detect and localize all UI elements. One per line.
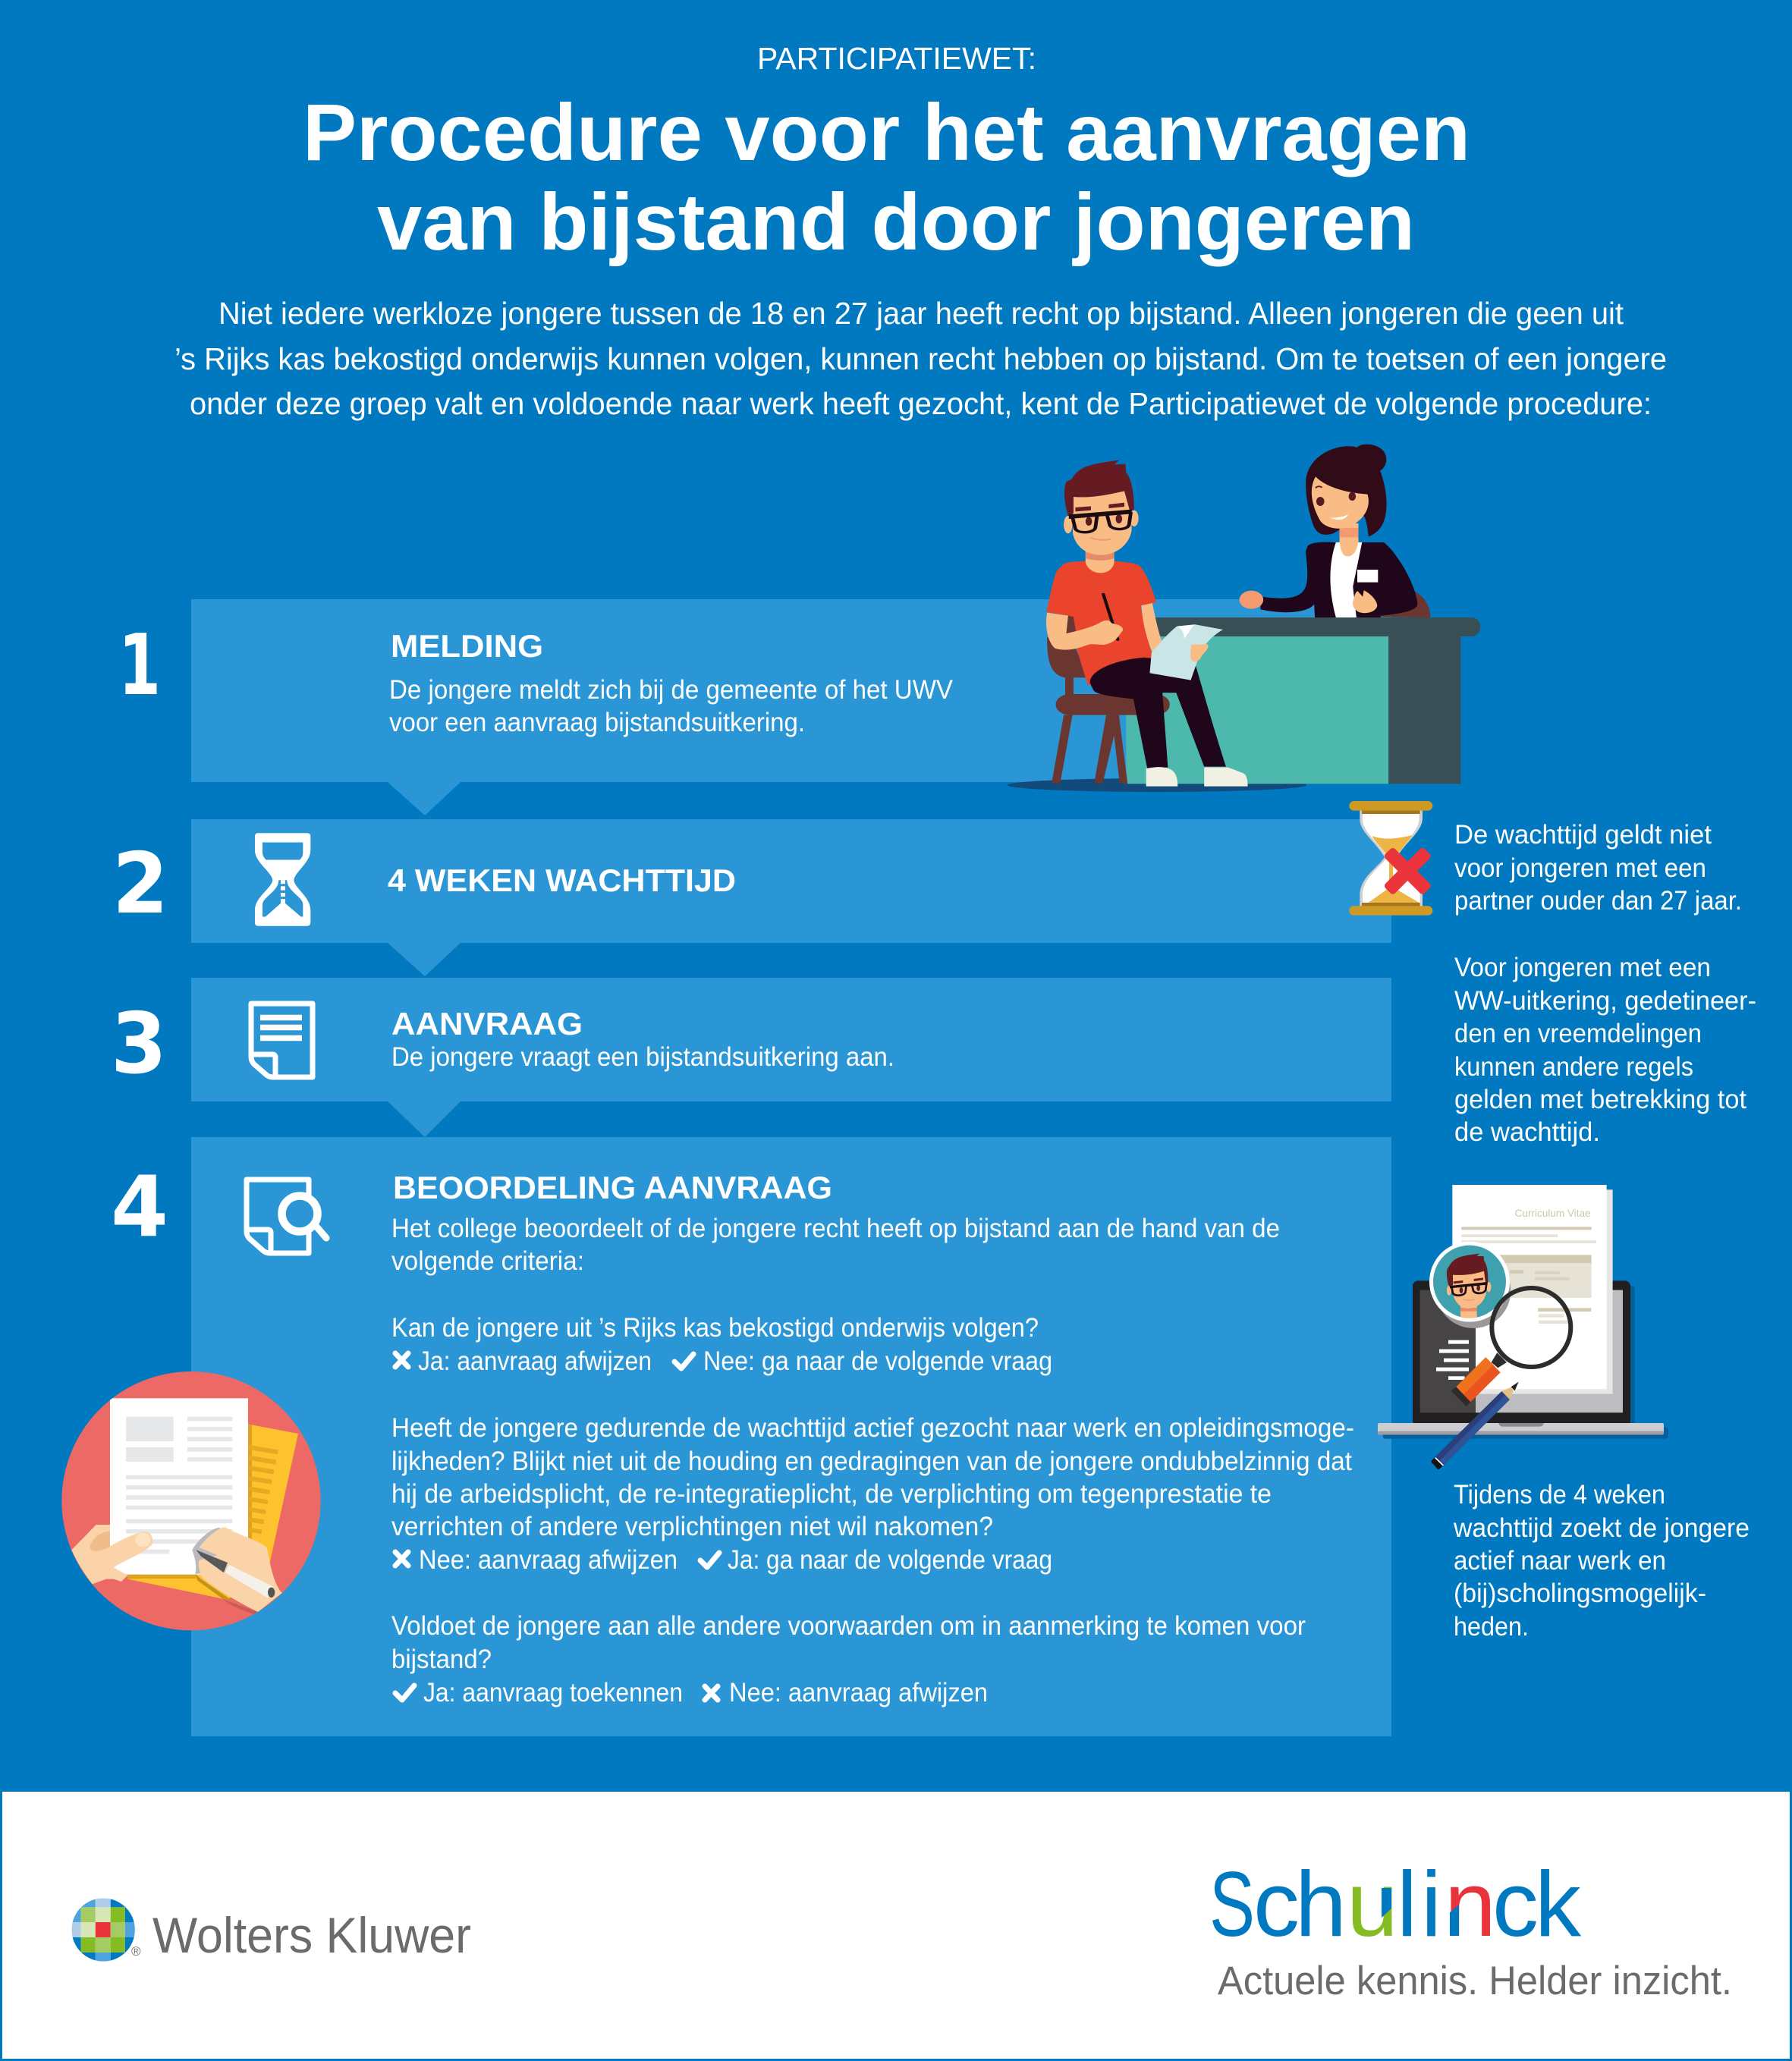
side note: zoeken naar werk bbox=[1453, 1479, 1750, 1642]
side note: wachttijd exceptions: Voor jongeren met een bbox=[1454, 952, 1711, 982]
illustration: man and receptionist at desk bbox=[1008, 445, 1480, 792]
body: melding: De jongere meldt zich bij de gemeente of het UWV bbox=[389, 674, 953, 705]
panel: melding bbox=[191, 599, 1391, 815]
desk bbox=[1126, 636, 1460, 784]
wordmark: Wolters Kluwer bbox=[152, 1907, 471, 1963]
icon: document bbox=[251, 1004, 313, 1077]
side note: wachttijd exceptions: kunnen andere regels bbox=[1454, 1051, 1693, 1082]
side note: wachttijd exceptions bbox=[1454, 819, 1756, 1147]
panel: wachttijd bbox=[191, 819, 1391, 976]
side note: zoeken naar werk: Tijdens de 4 weken bbox=[1454, 1479, 1665, 1510]
side note: wachttijd exceptions: partner ouder dan 27 jaar. bbox=[1454, 885, 1742, 916]
desk top bbox=[1153, 617, 1480, 636]
cv label: Curriculum Vitae bbox=[1515, 1207, 1591, 1219]
text: introduction criteria: Het college beoordeelt of de jongere recht heeft op bijstand aan de hand van de bbox=[391, 1213, 1280, 1243]
text: question 2: hij de arbeidsplicht, de re-integratieplicht, de verplichting om tegenprestatie te bbox=[391, 1478, 1272, 1509]
side note: wachttijd exceptions: voor jongeren met een bbox=[1454, 853, 1706, 883]
yellow sheet bbox=[127, 1424, 298, 1600]
intro text bbox=[174, 296, 1667, 421]
step numbers: 4 bbox=[111, 1158, 168, 1256]
wordmark: h bbox=[1295, 1852, 1347, 1956]
seated man bbox=[1046, 460, 1248, 787]
icon: hourglass bbox=[255, 833, 310, 926]
tagline: Actuele kennis. Helder inzicht. bbox=[1218, 1959, 1732, 2003]
side note: zoeken naar werk: actief naar werk en bbox=[1454, 1545, 1666, 1576]
text: question 1 bbox=[391, 1312, 1052, 1376]
body: melding bbox=[389, 674, 953, 737]
white sheet bbox=[110, 1398, 248, 1575]
heading: aanvraag: AANVRAAG bbox=[391, 1006, 583, 1041]
logo: schulinck bbox=[1209, 1852, 1732, 2003]
title: Procedure voor het aanvragen bbox=[303, 88, 1470, 178]
text: question 3 bbox=[391, 1610, 1306, 1708]
panel: aanvraag bbox=[191, 978, 1391, 1137]
wordmark: c bbox=[1492, 1852, 1539, 1956]
text: introduction criteria: volgende criteria: bbox=[391, 1246, 584, 1276]
laptop base bbox=[1378, 1423, 1664, 1434]
heading: melding: MELDING bbox=[391, 628, 543, 664]
wordmark: S bbox=[1209, 1852, 1255, 1956]
side note: wachttijd exceptions: WW-uitkering, gedetineer- bbox=[1454, 985, 1756, 1016]
wordmark: i bbox=[1421, 1852, 1441, 1956]
step numbers: 1 bbox=[118, 617, 161, 715]
floor shadow bbox=[1008, 778, 1306, 792]
icon: document with magnifier bbox=[247, 1180, 326, 1253]
body: melding: voor een aanvraag bijstandsuitkering. bbox=[389, 707, 805, 737]
pencil bbox=[1431, 1382, 1519, 1470]
text: introduction criteria bbox=[391, 1213, 1280, 1276]
text: question 1: Nee: ga naar de volgende vraag bbox=[703, 1346, 1052, 1376]
icon: hourglass with red cross bbox=[1349, 801, 1432, 916]
side note: zoeken naar werk: heden. bbox=[1454, 1611, 1529, 1642]
text: question 2: Nee: aanvraag afwijzen bbox=[419, 1544, 678, 1575]
logo mark bbox=[71, 1898, 135, 1962]
wordmark: c bbox=[1253, 1852, 1300, 1956]
magnifier bbox=[1451, 1288, 1570, 1406]
title bbox=[303, 88, 1470, 267]
body: aanvraag: De jongere vraagt een bijstandsuitkering aan. bbox=[391, 1041, 894, 1072]
heading: beoordeling aanvraag: BEOORDELING AANVRAAG bbox=[393, 1170, 832, 1205]
header bbox=[174, 41, 1667, 421]
text: question 2: Ja: ga naar de volgende vraag bbox=[728, 1544, 1052, 1575]
text: question 3: Ja: aanvraag toekennen bbox=[423, 1677, 683, 1708]
registered mark: ® bbox=[131, 1944, 141, 1959]
side note: zoeken naar werk: wachttijd zoekt de jongere bbox=[1453, 1513, 1750, 1543]
wordmark: u bbox=[1347, 1852, 1398, 1956]
wordmark: l bbox=[1397, 1852, 1417, 1956]
wordmark: k bbox=[1535, 1852, 1582, 1956]
intro text: ’s Rijks kas bekostigd onderwijs kunnen volgen, kunnen recht hebben op bijstand. Om te toetsen of een jongere bbox=[174, 341, 1667, 376]
text: question 2: Heeft de jongere gedurende de wachttijd actief gezocht naar werk en opleidingsmoge- bbox=[391, 1412, 1354, 1443]
intro text: Niet iedere werkloze jongere tussen de 18 en 27 jaar heeft recht op bijstand. Alleen jongeren die geen uit bbox=[218, 296, 1624, 331]
logo: wolters kluwer bbox=[71, 1898, 471, 1963]
text: question 2 bbox=[391, 1412, 1354, 1575]
avatar bbox=[1429, 1242, 1511, 1328]
text: question 3: Voldoet de jongere aan alle andere voorwaarden om in aanmerking te komen voor bbox=[391, 1610, 1306, 1641]
receptionist bbox=[1240, 445, 1430, 617]
side note: wachttijd exceptions: den en vreemdelingen bbox=[1454, 1018, 1702, 1048]
side note: wachttijd exceptions: gelden met betrekking tot bbox=[1454, 1084, 1746, 1114]
step numbers: 2 bbox=[112, 835, 168, 933]
kicker: PARTICIPATIEWET: bbox=[757, 41, 1036, 76]
text: question 2: lijkheden? Blijkt niet uit de houding en gedragingen van de jongere ondubbelzinnig dat bbox=[391, 1446, 1352, 1476]
text: question 2: verrichten of andere verplichtingen niet wil nakomen? bbox=[391, 1511, 993, 1541]
side note: wachttijd exceptions: De wachttijd geldt niet bbox=[1454, 819, 1712, 850]
text: question 3: bijstand? bbox=[391, 1644, 492, 1674]
side note: zoeken naar werk: (bij)scholingsmogelijk- bbox=[1454, 1578, 1706, 1608]
side note: wachttijd exceptions: de wachttijd. bbox=[1454, 1117, 1600, 1147]
text: question 1: Kan de jongere uit ’s Rijks kas bekostigd onderwijs volgen? bbox=[391, 1312, 1039, 1343]
step numbers: 3 bbox=[111, 995, 167, 1093]
illustration: cv on laptop bbox=[1378, 1185, 1668, 1470]
right hand with pen bbox=[192, 1527, 282, 1615]
illustration: hands signing document bbox=[61, 1371, 321, 1630]
panel: beoordeling aanvraag bbox=[191, 1137, 1391, 1736]
step numbers bbox=[111, 617, 168, 1256]
text: question 3: Nee: aanvraag afwijzen bbox=[729, 1677, 988, 1708]
text: question 1: Ja: aanvraag afwijzen bbox=[418, 1346, 652, 1376]
footer band bbox=[2, 1792, 1790, 2059]
left hand bbox=[71, 1525, 152, 1584]
intro text: onder deze groep valt en voldoende naar werk heeft gezocht, kent de Participatiewet de volgende procedure: bbox=[190, 386, 1652, 421]
wordmark bbox=[1209, 1852, 1582, 1956]
title: van bijstand door jongeren bbox=[377, 178, 1415, 267]
wordmark: n bbox=[1445, 1852, 1496, 1956]
heading: wachttijd: 4 WEKEN WACHTTIJD bbox=[388, 862, 736, 898]
